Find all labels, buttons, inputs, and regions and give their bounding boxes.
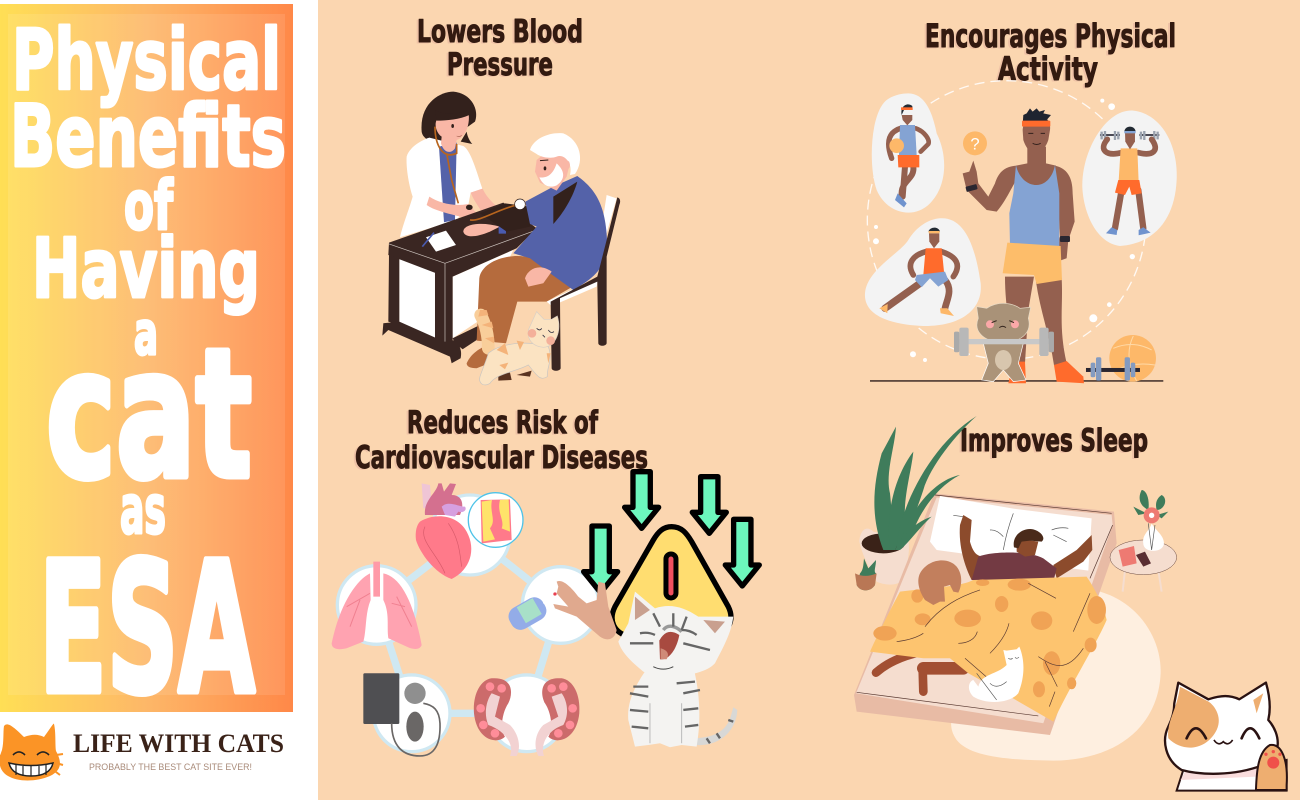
question bubble: ? <box>970 134 980 153</box>
panel: title banner <box>0 4 293 734</box>
artery inset <box>468 493 523 547</box>
heading: Lowers Blood Pressure: Lowers Blood <box>417 14 583 50</box>
title: Physical Benefits of Having a Cat as ESA: Having <box>32 222 260 317</box>
exclamation mark <box>666 554 676 598</box>
doctor <box>400 92 505 237</box>
main man <box>963 108 1084 383</box>
connectors <box>377 533 560 713</box>
title: Physical Benefits of Having a Cat as ESA: Physical <box>12 11 281 109</box>
bed <box>854 493 1117 735</box>
blood pressure cuff <box>363 673 440 756</box>
logo tagline: PROBABLY THE BEST CAT SITE EVER! <box>89 762 252 772</box>
sleeping man <box>876 515 1092 692</box>
heading: Improves Sleep: Improves Sleep <box>960 423 1148 459</box>
hand <box>553 581 617 639</box>
ground line <box>870 379 1163 383</box>
down arrows <box>584 472 759 593</box>
illustration: organs network <box>332 472 759 756</box>
desk <box>382 203 537 363</box>
pose bubble 3 <box>1082 111 1177 246</box>
pose bubble 1 <box>872 93 944 213</box>
title: Physical Benefits of Having a Cat as ESA: cat <box>46 311 252 518</box>
heart <box>416 483 471 579</box>
logo wordmark: LIFE WITH CATS <box>73 729 284 758</box>
title: Physical Benefits of Having a Cat as ESA: as <box>120 471 166 550</box>
title: Physical Benefits of Having a Cat as ESA: Benefits <box>10 87 286 187</box>
plant pots <box>855 529 909 590</box>
background blob <box>951 592 1161 761</box>
title: Physical Benefits of Having a Cat as ESA: of <box>124 167 174 246</box>
kidneys <box>474 678 579 756</box>
pose bubble 2 <box>865 218 981 326</box>
heading: Lowers Blood Pressure: Pressure <box>447 47 553 83</box>
title: Physical Benefits of Having a Cat as ESA: ESA <box>39 525 255 734</box>
heading: Encourages Physical Activity: Encourages Physical <box>925 17 1176 55</box>
illustration: exercising man and cat <box>865 81 1177 383</box>
patient <box>463 133 617 368</box>
dashed circle <box>867 81 1146 362</box>
warning triangle <box>612 527 731 637</box>
title: Physical Benefits of Having a Cat as ESA <box>10 11 286 734</box>
heading: Reduces Risk of Cardiovascular Diseases: Reduces Risk of <box>407 405 598 441</box>
blanket <box>870 577 1107 722</box>
logo: Life With Cats <box>0 724 284 780</box>
lungs <box>332 562 422 649</box>
question bubble <box>963 131 987 155</box>
panel: encourages physical activity <box>865 17 1177 383</box>
side table <box>1110 490 1177 592</box>
illustration: doctor measuring patient's blood pressure with cat <box>382 92 620 385</box>
kitten <box>618 592 737 747</box>
illustration: person sleeping with cats <box>854 416 1287 791</box>
heading: Encourages Physical Activity: Activity <box>998 50 1098 88</box>
heading: Lowers Blood Pressure <box>417 14 583 83</box>
chair <box>551 197 620 371</box>
cat <box>478 310 559 385</box>
panel: lowers blood pressure <box>382 14 620 385</box>
cat lifting barbell <box>954 303 1054 382</box>
waving cat <box>1165 683 1287 791</box>
heading: Reduces Risk of Cardiovascular Diseases: Cardiovascular Diseases <box>355 440 648 476</box>
plant leaves <box>874 416 977 550</box>
white cat <box>969 647 1023 702</box>
icon: grinning orange cat <box>0 724 63 780</box>
heading: Encourages Physical Activity <box>925 17 1176 88</box>
panel: improves sleep <box>854 416 1287 791</box>
glucose meter <box>505 592 557 634</box>
panel: reduces risk of cardiovascular diseases <box>332 405 759 756</box>
node circles <box>337 495 599 752</box>
ball and dumbbell <box>1086 335 1156 382</box>
brown cat <box>918 560 961 605</box>
title: Physical Benefits of Having a Cat as ESA: a <box>134 299 158 369</box>
heading: Reduces Risk of Cardiovascular Diseases <box>355 405 648 476</box>
